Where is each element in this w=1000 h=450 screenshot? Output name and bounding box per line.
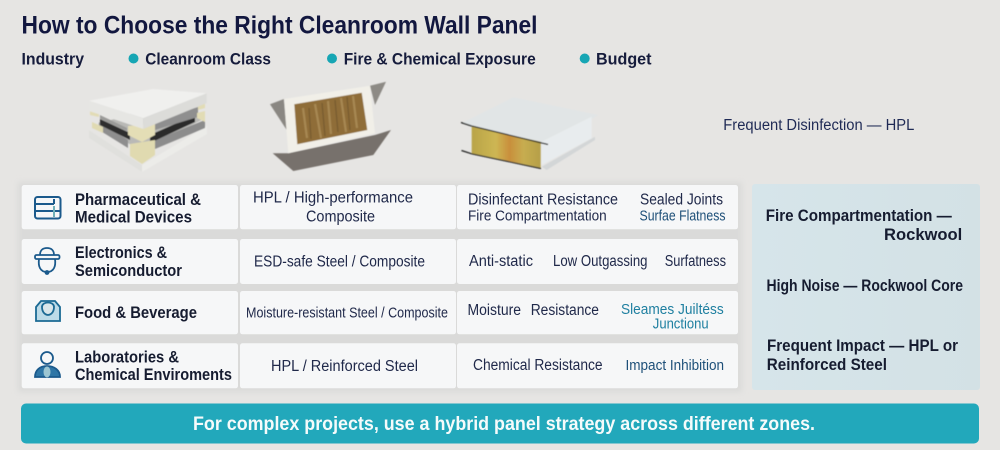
selection criteria row: Industry (22, 49, 85, 68)
row: laboratories and chemical environments: HPL / Reinforced Steel (271, 358, 418, 375)
row: electronics and semiconductor: Semiconductor (75, 262, 183, 280)
panel: scenario recommendations (752, 184, 980, 390)
row: pharmaceutical and medical devices: Surfae Flatness (640, 209, 726, 225)
panel: scenario recommendations: Frequent Impact — HPL or (767, 337, 959, 355)
row: food and beverage (22, 291, 738, 334)
table backdrop shadow (18, 182, 742, 392)
panel: scenario recommendations: High Noise — Rockwool Core (766, 277, 963, 295)
icon: cleanroom hood (35, 248, 60, 274)
icon: medical box (35, 197, 60, 218)
row: pharmaceutical and medical devices: HPL / High-performance (253, 189, 413, 206)
row: electronics and semiconductor: Low Outgassing (553, 253, 648, 270)
panel: scenario recommendations: Fire Compartmentation — (766, 207, 952, 225)
panel: recommendations table (22, 185, 738, 388)
image: sandwich panel with mineral wool core (461, 97, 598, 170)
row: electronics and semiconductor: Anti-static (469, 253, 533, 270)
row: pharmaceutical and medical devices: Medical Devices (75, 209, 192, 227)
banner: hybrid panel strategy (21, 404, 979, 444)
row: laboratories and chemical environments: Chemical Enviroments (75, 366, 232, 384)
selection criteria row: Budget (596, 49, 652, 68)
panel: scenario recommendations: Reinforced Steel (767, 356, 887, 374)
row: food and beverage: Moisture-resistant Steel / Composite (246, 305, 448, 321)
title: How to Choose the Right Cleanroom Wall Panel (22, 11, 538, 39)
row: food and beverage: Moisture (468, 302, 521, 319)
row: pharmaceutical and medical devices: Sealed Joints (640, 191, 723, 208)
row: food and beverage: Food & Beverage (75, 304, 197, 322)
note: frequent disinfection: Frequent Disinfection — HPL (723, 117, 915, 134)
row: pharmaceutical and medical devices: Disinfectant Resistance (468, 191, 618, 208)
image: HPL layered panel (89, 89, 207, 172)
row: electronics and semiconductor: Electronics & (75, 244, 167, 262)
row: laboratories and chemical environments (22, 343, 738, 388)
selection criteria row: Fire & Chemical Exposure (344, 49, 536, 68)
row: laboratories and chemical environments: Chemical Resistance (473, 357, 603, 374)
row: laboratories and chemical environments: Laboratories & (75, 349, 179, 367)
icon: lab worker (35, 352, 60, 378)
row: electronics and semiconductor: Surfatness (665, 253, 726, 270)
panel: scenario recommendations: Rockwool (884, 226, 962, 244)
row: pharmaceutical and medical devices (22, 185, 738, 229)
row: pharmaceutical and medical devices: Fire Compartmentation (468, 208, 607, 225)
row: pharmaceutical and medical devices: Composite (306, 209, 375, 226)
row: laboratories and chemical environments: Impact Inhibition (626, 357, 724, 374)
row: food and beverage: Sleames Juiltéss (621, 301, 724, 318)
row: food and beverage: Resistance (531, 302, 599, 319)
row: food and beverage: Junctionu (653, 315, 709, 332)
selection criteria row: Cleanroom Class (145, 49, 271, 68)
selection criteria row (22, 49, 652, 68)
row: pharmaceutical and medical devices: Pharmaceutical & (75, 191, 201, 209)
banner: hybrid panel strategy: For complex projects, use a hybrid panel strategy across different zones. (193, 413, 815, 435)
icon: food tray (36, 301, 60, 321)
image: rockwool panel section (270, 82, 391, 171)
row: electronics and semiconductor (22, 239, 738, 284)
row: electronics and semiconductor: ESD-safe Steel / Composite (254, 254, 425, 271)
